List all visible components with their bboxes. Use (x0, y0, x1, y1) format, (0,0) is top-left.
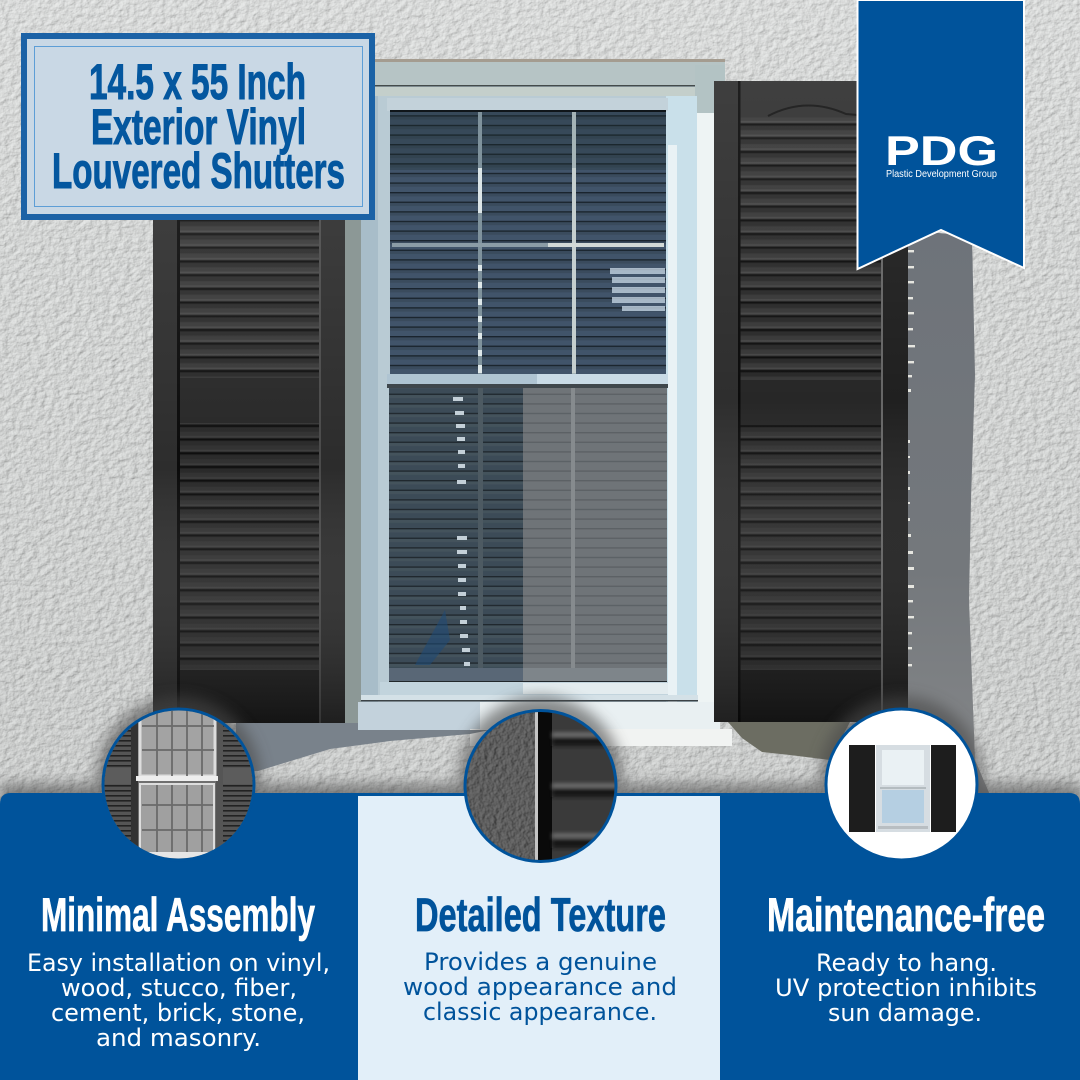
title text: 14.5 x 55 Inch (89, 54, 306, 110)
right stile (321, 215, 345, 723)
left casing (345, 96, 389, 725)
body text: classic appearance. (423, 998, 657, 1026)
sill shadow, left (236, 723, 490, 772)
top rail with arch (740, 81, 882, 117)
title plate (24, 36, 372, 217)
body text (27, 949, 330, 1052)
lower louvers (740, 425, 882, 670)
circle photo: texture close-up (464, 706, 620, 866)
ribbon with PDG logo (858, 0, 1024, 269)
left shutter (153, 215, 345, 723)
muntins (478, 112, 482, 374)
right casing (666, 65, 725, 738)
upper louvers (740, 117, 882, 381)
sunlight dashes beside right shutter (908, 250, 915, 666)
bottom rail and sill (358, 682, 732, 746)
title text: Louvered Shutters (52, 143, 345, 199)
body text: wood, stucco, fiber, (61, 974, 297, 1002)
bottom rail (178, 670, 320, 723)
soft shadow around bottom panels (0, 696, 1080, 860)
title text: Exterior Vinyl (91, 99, 306, 155)
right product shutter (931, 745, 956, 832)
shadow cast by right shutter (900, 230, 990, 795)
body text: wood appearance and (403, 973, 677, 1001)
window head casing (375, 59, 725, 96)
window (345, 59, 732, 746)
product window (876, 745, 930, 832)
circle photo: product cut-out (824, 708, 978, 862)
top rail of upper sash (387, 98, 668, 111)
sill shadow, right (728, 722, 850, 760)
lower louvers (178, 423, 320, 670)
left stile (153, 215, 177, 723)
lower sash (140, 784, 214, 854)
body text: Easy installation on vinyl, (27, 949, 330, 977)
meeting rail (387, 374, 668, 388)
body text (775, 949, 1037, 1027)
title text (52, 54, 345, 199)
upper louvers (178, 215, 320, 379)
heading: Detailed Texture (415, 888, 666, 941)
right stile (882, 81, 908, 722)
body text: sun damage. (828, 999, 982, 1027)
background: stucco wall (0, 0, 1080, 800)
circle photo: window installation (100, 705, 260, 865)
sun patch on blinds (610, 268, 665, 311)
sun reflections (453, 397, 470, 666)
logo: PDG (885, 127, 998, 174)
upper sash (140, 705, 215, 776)
panel: maintenance-free (720, 793, 1080, 1080)
middle rail (178, 378, 320, 423)
body text: UV protection inhibits (775, 974, 1037, 1002)
body text: Provides a genuine (424, 948, 657, 976)
lower glass with blinds and screen (389, 388, 667, 682)
body text: cement, brick, stone, (51, 999, 305, 1027)
right shutter (714, 81, 908, 722)
panel: detailed texture (358, 793, 720, 1080)
heading: Minimal Assembly (41, 888, 315, 941)
left product shutter (849, 745, 875, 832)
window backing (361, 85, 698, 705)
left stile (714, 81, 739, 722)
body text: and masonry. (96, 1024, 261, 1052)
bottom rail (740, 670, 882, 722)
panel: minimal assembly (0, 793, 358, 1080)
upper glass with blinds (390, 110, 666, 374)
logo: Plastic Development Group (886, 169, 997, 180)
middle rail (740, 380, 882, 425)
body text (403, 948, 677, 1026)
body text: Ready to hang. (816, 949, 997, 977)
